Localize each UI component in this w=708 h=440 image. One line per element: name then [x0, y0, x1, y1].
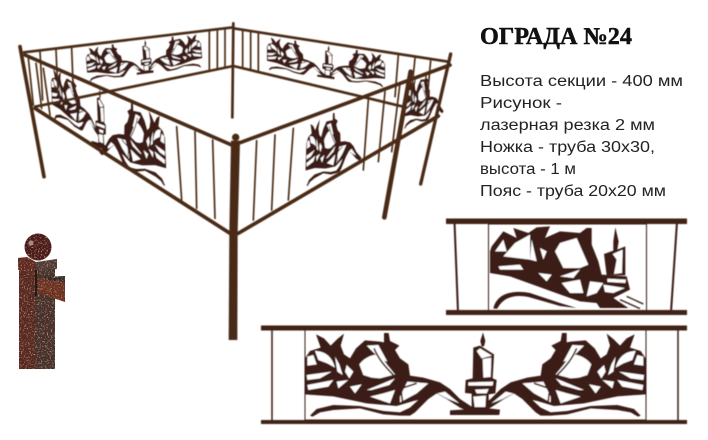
title: ОГРАДА №24: [480, 24, 632, 50]
large section detail: [261, 326, 687, 424]
specifications text: Ножка - труба 30х30,: [480, 139, 655, 156]
specifications text: [480, 73, 683, 200]
specifications text: высота - 1 м: [480, 161, 576, 178]
laser-cut panel: front right: [305, 100, 363, 187]
fence illustration: [20, 23, 451, 340]
small section detail: [446, 218, 687, 315]
specifications text: лазерная резка 2 мм: [480, 117, 655, 134]
specifications text: Высота секции - 400 мм: [480, 73, 683, 90]
laser-cut panel: front left, outer half: [50, 66, 100, 140]
laser-cut panel: far right side: [403, 66, 447, 129]
laser-cut panel: front left, inner half: [97, 87, 167, 187]
laser-cut panel: front left, candle: [89, 84, 108, 151]
fence frame: rails, bars and posts: [20, 23, 451, 340]
laser-cut panel: back left: [85, 33, 203, 82]
small section laser-cut pattern: [490, 226, 643, 309]
post close-up photo: [18, 234, 65, 369]
laser-cut panel: back right: [267, 36, 385, 88]
specifications text: Рисунок -: [480, 95, 562, 112]
specifications text: Пояс - труба 20х20 мм: [480, 183, 666, 200]
